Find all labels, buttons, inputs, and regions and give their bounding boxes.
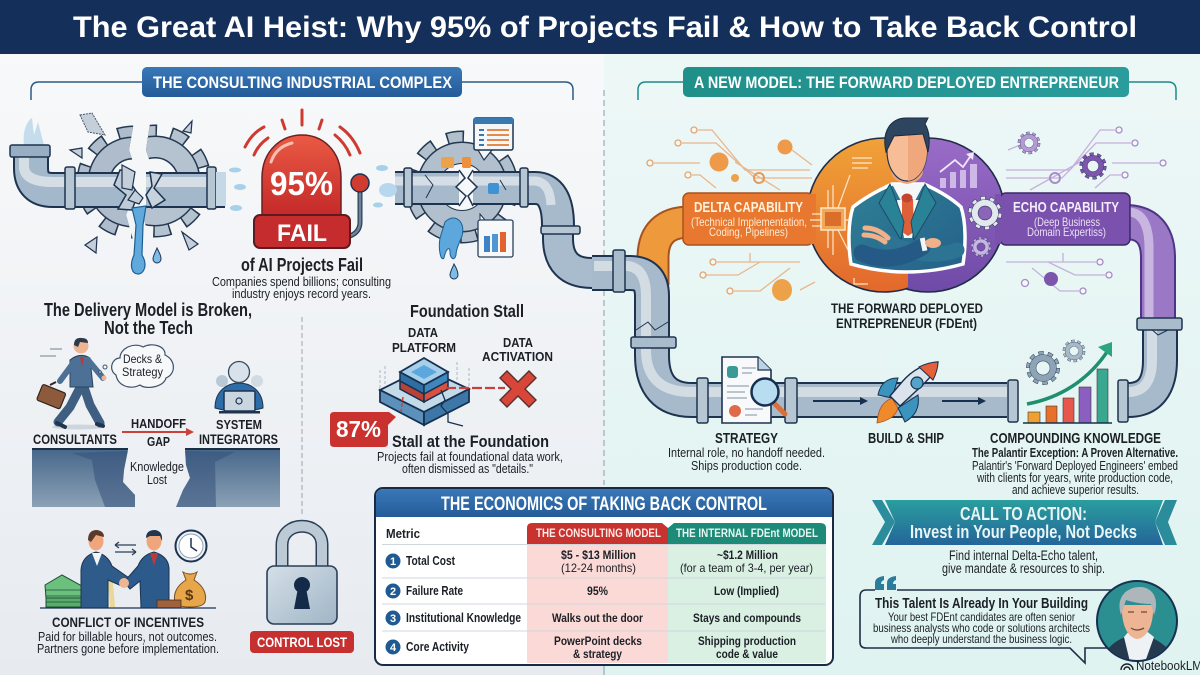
text: find internal talent	[942, 548, 1105, 576]
heading: the consulting industrial complex	[31, 67, 573, 100]
labels: data activation	[482, 335, 553, 364]
text: strategy: Ships production code.	[691, 458, 802, 473]
panel: delta capability: Coding, Pipelines)	[709, 225, 788, 239]
icon: strategy document	[722, 357, 785, 423]
panel: echo capability	[851, 138, 1130, 292]
arrow: handoff	[122, 428, 194, 436]
row: failure rate: Failure Rate	[406, 584, 463, 598]
table: economics of taking back control	[375, 488, 833, 665]
row: core activity: 4	[390, 642, 397, 654]
icon: alarm 95% fail: 95%	[270, 165, 333, 202]
illustration: handshake conflict of incentives	[40, 530, 216, 608]
banner: call to action	[872, 500, 1177, 545]
text: stall at the foundation: Stall at the Foundation	[392, 432, 549, 451]
illustration: broken pipe and gear, right	[373, 118, 592, 279]
arrow: build to compounding	[942, 397, 986, 405]
callout: this talent is already in your building: business analysts who code or solutions architects	[873, 621, 1090, 635]
labels: consultants handoff gap integrators: CONSULTANTS	[33, 432, 117, 447]
callout: this talent is already in your building: Your best FDEnt candidates are often senior	[888, 610, 1075, 624]
labels: consultants handoff gap integrators: HANDOFF	[131, 416, 186, 431]
illustration: data platform stack: PLATFORM	[392, 340, 456, 355]
row: failure rate: 95%	[587, 584, 608, 598]
panel: echo capability: (Deep Business	[1034, 215, 1100, 229]
icon: small bar chart card	[478, 214, 513, 257]
text: find internal talent: Find internal Delta-Echo talent,	[949, 548, 1098, 563]
text: conflict of incentives	[37, 614, 219, 656]
illustration: data platform stack: DATA	[408, 325, 439, 340]
heading: the consulting industrial complex: THE CONSULTING INDUSTRIAL COMPLEX	[153, 73, 453, 92]
row: total cost: $5 - $13 Million	[561, 548, 636, 562]
banner: call to action: CALL TO ACTION:	[960, 504, 1087, 524]
text: compounding knowledge and palantir	[972, 430, 1178, 497]
icon: alarm 95% fail: FAIL	[277, 220, 327, 247]
text: compounding knowledge and palantir: and achieve superior results.	[1012, 483, 1139, 497]
banner: call to action: Invest in Your People, Not Decks	[910, 522, 1137, 542]
column: consulting model	[527, 523, 668, 544]
callout: decks and strategy cloud: Decks &	[123, 352, 162, 366]
title	[0, 0, 1200, 54]
panel: delta capability: DELTA CAPABILITY	[694, 199, 803, 216]
pipeline: grey strategy to knowledge pipe	[592, 250, 1182, 423]
text: of AI projects fail: Companies spend billions; consulting	[212, 274, 391, 289]
illustration: circuit traces	[647, 127, 1166, 301]
illustration: broken pipe and gear, left	[10, 113, 246, 274]
row: failure rate	[386, 584, 779, 598]
callout: this talent is already in your building	[860, 576, 1120, 663]
arrow: strategy to build	[813, 397, 868, 405]
heading: the delivery model is broken: The Delivery Model is Broken,	[44, 300, 252, 320]
icon: chip	[810, 158, 872, 284]
row: institutional knowledge: 3	[390, 613, 396, 625]
row: core activity: PowerPoint decks	[554, 634, 642, 648]
row: core activity: code & value	[716, 647, 778, 661]
panel: echo capability: ECHO CAPABILITY	[1013, 199, 1119, 216]
text: strategy	[668, 430, 825, 473]
icon: growth chart	[940, 152, 977, 188]
text: build and ship: BUILD & SHIP	[868, 430, 944, 447]
text: forward deployed entrepreneur label: ENTREPRENEUR (FDEnt)	[836, 315, 977, 331]
row: institutional knowledge: Walks out the door	[552, 611, 643, 625]
labels: consultants handoff gap integrators	[33, 416, 278, 449]
row: total cost	[386, 548, 813, 575]
text: stall at the foundation	[377, 432, 563, 476]
icon: portrait	[1097, 581, 1178, 665]
icon: quote marks	[875, 576, 896, 590]
row: core activity: Shipping production	[698, 634, 796, 648]
icon: money bag	[174, 572, 206, 607]
icon: dashboard window	[474, 118, 513, 160]
column: internal FDEnt model	[668, 523, 826, 544]
panel: delta capability: (Technical Implementation,	[691, 215, 807, 229]
row: total cost: Total Cost	[406, 554, 456, 568]
icon: rocket	[877, 362, 938, 423]
table title: THE ECONOMICS OF TAKING BACK CONTROL	[441, 494, 767, 515]
row: core activity: Core Activity	[406, 640, 469, 654]
badge: 87%	[330, 412, 396, 447]
chart: compounding growth bars	[1023, 341, 1112, 423]
row: core activity: & strategy	[573, 647, 622, 661]
icon: clock	[176, 530, 206, 562]
text: forward deployed entrepreneur label: THE FORWARD DEPLOYED	[831, 300, 983, 316]
text: conflict of incentives: Paid for billable hours, not outcomes.	[38, 629, 217, 644]
row: total cost: (for a team of 3-4, per year)	[680, 561, 813, 575]
callout: this talent is already in your building: This Talent Is Already In Your Building	[875, 595, 1088, 612]
row: institutional knowledge	[386, 610, 801, 626]
heading: the delivery model is broken	[44, 300, 252, 338]
illustration: system integrator at laptop	[215, 362, 263, 414]
row: total cost: 1	[390, 556, 396, 568]
row: institutional knowledge: Stays and compounds	[693, 611, 801, 625]
row: institutional knowledge: Institutional Knowledge	[406, 611, 521, 625]
heading: foundation stall: Foundation Stall	[410, 301, 524, 321]
icon: money bag: $	[185, 587, 194, 604]
row: failure rate: Low (Implied)	[714, 584, 779, 598]
column: internal FDEnt model: THE INTERNAL FDEnt MODEL	[676, 528, 818, 540]
badge: control lost	[250, 631, 354, 653]
title: The Great AI Heist: Why 95% of Projects Fail & How to Take Back Control	[73, 11, 1137, 44]
labels: data activation: DATA	[503, 335, 534, 350]
text: strategy: Internal role, no handoff needed.	[668, 445, 825, 460]
labels: consultants handoff gap integrators: INTEGRATORS	[199, 432, 278, 447]
callout: decks and strategy cloud: Strategy	[122, 365, 163, 379]
icon: padlock	[267, 526, 337, 624]
callout: decks and strategy cloud	[99, 345, 173, 387]
illustration: forward deployed entrepreneur figure	[849, 118, 965, 272]
labels: consultants handoff gap integrators: GAP	[147, 434, 170, 449]
column: consulting model: THE CONSULTING MODEL	[536, 528, 661, 540]
text: conflict of incentives: Partners gone before implementation.	[37, 641, 219, 656]
illustration: knowledge gap cliffs: Lost	[147, 473, 167, 487]
icon: alarm 95% fail	[245, 110, 369, 248]
labels: data activation: ACTIVATION	[482, 349, 553, 364]
text: of AI projects fail	[212, 255, 391, 301]
heading: the delivery model is broken: Not the Tech	[104, 318, 193, 338]
row: total cost: (12-24 months)	[561, 561, 636, 575]
badge: 87%: 87%	[336, 416, 381, 442]
illustration: walking consultant	[37, 338, 106, 430]
row: core activity	[386, 634, 796, 661]
text: of AI projects fail: industry enjoys record years.	[232, 286, 371, 301]
text: strategy: STRATEGY	[715, 430, 778, 447]
table: economics of taking back control: Metric	[386, 526, 420, 541]
text: stall at the foundation: Projects fail at foundational data work,	[377, 449, 563, 464]
labels: consultants handoff gap integrators: SYSTEM	[216, 417, 262, 432]
illustration: knowledge gap cliffs	[32, 449, 280, 507]
table title	[376, 489, 832, 517]
heading: a new model: A NEW MODEL: THE FORWARD DEPLOYED ENTREPRENEUR	[694, 73, 1119, 92]
text: forward deployed entrepreneur label	[831, 300, 983, 331]
row: total cost: ~$1.2 Million	[717, 548, 778, 562]
heading: a new model	[638, 67, 1176, 100]
icon: red x	[500, 371, 536, 407]
panel: delta capability	[682, 137, 908, 293]
illustration: data platform stack	[380, 325, 505, 426]
panel: echo capability: Domain Expertiss)	[1027, 225, 1106, 239]
row: failure rate: 2	[390, 586, 396, 598]
badge: control lost: CONTROL LOST	[257, 635, 348, 650]
callout: this talent is already in your building: who deeply understand the business logic.	[890, 632, 1072, 646]
illustration: knowledge gap cliffs: Knowledge	[130, 460, 184, 474]
text: stall at the foundation: often dismissed as "details."	[402, 461, 533, 476]
text: find internal talent: give mandate & resources to ship.	[942, 561, 1105, 576]
text: conflict of incentives: CONFLICT OF INCENTIVES	[52, 614, 204, 630]
text: of AI projects fail: of AI Projects Fail	[241, 255, 363, 275]
pipeline: orange and purple capability pipes	[653, 212, 1158, 322]
